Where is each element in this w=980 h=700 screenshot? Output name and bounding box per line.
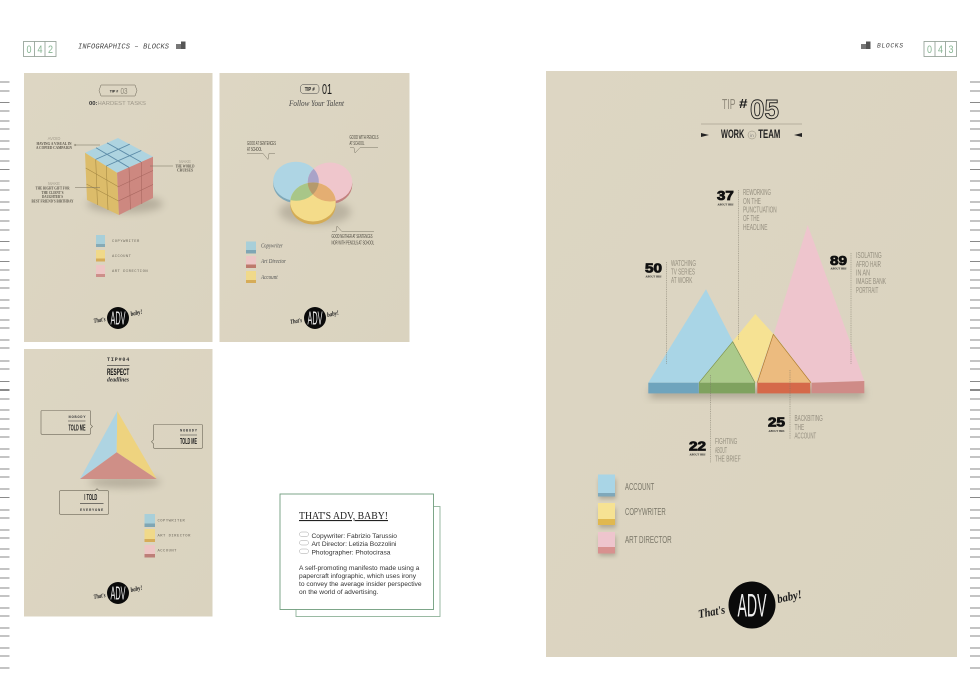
data label: 22: ABOUT HRS <box>689 452 706 456</box>
venn diagram <box>273 162 352 224</box>
logo: baby! <box>130 309 144 318</box>
data label: 37: HEADLINE <box>743 222 768 232</box>
legend <box>144 514 191 558</box>
tip 01 heading: Follow Your Talent <box>288 98 345 108</box>
pink triangle: art director 89 <box>774 225 864 393</box>
legend <box>246 242 287 283</box>
data label: 37: OF THE <box>743 213 760 223</box>
logo: ADV <box>110 308 126 328</box>
panel: tip 04 respect deadlines <box>24 349 212 616</box>
legend <box>96 235 148 277</box>
callout: i told everyone: EVERYONE <box>80 509 104 513</box>
callout: avoid: A COPIED CAMPAIGN <box>36 145 72 150</box>
data label: 22: ABOUT <box>715 445 727 455</box>
tip 05 heading: # <box>739 96 748 111</box>
callout: good neither: NOR WITH PENCILS AT SCHOOL <box>332 240 374 246</box>
rubik cube <box>85 138 153 215</box>
data label: 50: ABOUT HRS <box>645 274 662 278</box>
panel: tip 01 follow your talent <box>220 73 410 342</box>
callout: avoid: AVOID <box>48 136 60 141</box>
legend: Account <box>260 275 278 281</box>
page number right: 043: 0 <box>927 44 932 56</box>
tip 04 heading <box>107 357 130 384</box>
legend: ART DIRECTION <box>112 270 148 274</box>
legend: COPYWRITER <box>625 507 666 518</box>
page number right: 043 <box>924 42 956 56</box>
callout: i told everyone <box>60 489 108 514</box>
credits <box>300 532 397 556</box>
data label: 50: AT WORK <box>671 275 693 285</box>
data label: 50: 50 <box>645 262 662 276</box>
data label: 37: ON THE <box>743 196 761 206</box>
tip 03 heading: 03 <box>120 87 128 96</box>
tip 05 heading: in <box>750 133 754 138</box>
description <box>299 565 422 596</box>
credits: Art Director: Letizia Bozzolini <box>312 541 397 548</box>
logo: That's <box>93 592 106 601</box>
tip 03 heading: 00:HARDEST TASKS <box>89 101 147 107</box>
logo <box>93 307 144 329</box>
crop ticks: left edge <box>0 82 10 668</box>
description: papercraft infographic, which uses irony <box>299 573 417 580</box>
pyramid shadow <box>89 476 161 488</box>
data label: 89: ISOLATING <box>856 250 882 260</box>
tip 03 heading <box>89 85 147 107</box>
callout: good neither <box>332 226 374 246</box>
tip 04 heading: TIP#04 <box>107 357 129 363</box>
page number right: 043: 4 <box>938 44 943 56</box>
icon: blocks right <box>861 42 870 49</box>
description: on the world of advertising. <box>299 589 379 596</box>
pyramid <box>80 411 157 479</box>
callout: make the right gift: DAUGHTER'S <box>42 194 63 199</box>
data label: 25: ACCOUNT <box>794 431 816 441</box>
page number left: 042: 2 <box>48 44 53 56</box>
description: A self-promoting manifesto made using a <box>299 565 420 572</box>
callout: make the right gift: THE RIGHT GIFT FOR <box>36 186 70 190</box>
callout: good at sentences <box>247 141 276 160</box>
legend: ART DIRECTOR <box>625 535 672 546</box>
data label: 25: 25 <box>768 416 785 430</box>
legend: COPYWRITER <box>112 240 140 244</box>
callout: make the right gift: BEST FRIEND'S BIRTHDAY <box>32 198 74 204</box>
tip 04 heading: RESPECT <box>107 367 130 377</box>
logo: ADV <box>110 584 126 604</box>
blue triangle: account 50 <box>648 289 733 393</box>
data label: 25: BACKBITING <box>794 413 823 423</box>
tip 04 heading: deadlines <box>107 378 130 384</box>
data label: 37: ABOUT HRS <box>717 203 734 207</box>
data label: 89: 89 <box>830 254 847 268</box>
data label: 22: FIGHTING <box>715 436 737 446</box>
data label: 37 <box>717 187 777 340</box>
callout: i told everyone: I TOLD <box>84 493 97 502</box>
data label: 37: 37 <box>717 189 734 203</box>
data label: 50: WATCHING <box>671 258 696 268</box>
logo: That's <box>93 316 106 325</box>
legend: Art Director <box>260 259 287 265</box>
running header right: BLOCKS <box>877 42 903 50</box>
green overlap: fighting 22 <box>699 342 755 393</box>
callout: make the right gift: THE CLIENT'S <box>42 190 64 195</box>
data label: 50 <box>645 258 696 364</box>
logo: That's <box>290 317 303 326</box>
venn shadow <box>279 199 351 225</box>
data label: 89: AFRO HAIR <box>856 259 881 269</box>
tip 01 heading <box>288 81 345 108</box>
panel: tip 01 follow your talent: GOOD AT SENTENCES <box>247 141 276 147</box>
tip 01 heading: TIP # <box>305 87 315 93</box>
logo <box>290 307 340 329</box>
tip 05 heading: TEAM <box>758 129 780 141</box>
data label: 37: REWORKING <box>743 187 771 197</box>
data label: 25: THE <box>794 422 804 432</box>
logo: ADV <box>308 308 322 328</box>
callout: nobody told me right: TOLD ME <box>180 437 197 446</box>
callout: nobody told me right <box>152 424 202 448</box>
callout: good neither: GOOD NEITHER AT SENTENCES <box>332 234 373 240</box>
panel: tip 05 work in team <box>546 71 957 657</box>
callout: nobody told me right: NOBODY <box>180 430 198 434</box>
icon: blocks left <box>176 42 186 49</box>
callout: nobody told me left <box>41 410 92 434</box>
logo: baby! <box>326 310 340 319</box>
callout: make the world cruises: MAKE <box>179 159 191 164</box>
callout: make the world cruises <box>150 159 194 172</box>
legend <box>598 474 672 556</box>
page number left: 042: 0 <box>26 44 32 56</box>
legend: Copywriter <box>261 244 283 250</box>
logo: baby! <box>130 585 144 594</box>
legend: ACCOUNT <box>625 482 654 493</box>
tip 05 heading: 05 <box>750 94 779 124</box>
credits: Photographer: Photocirasa <box>312 550 391 556</box>
description: to convey the average insider perspective <box>299 581 422 588</box>
legend: ACCOUNT <box>112 255 132 259</box>
data label: 50: TV SERIES <box>671 267 695 277</box>
running header left: INFOGRAPHICS – BLOCKS <box>78 44 170 52</box>
logo: ADV <box>738 588 767 624</box>
data label: 89 <box>830 250 886 364</box>
logo <box>93 582 144 604</box>
panel: tip 03 hardest tasks <box>24 73 212 342</box>
data label: 22: THE BRIEF <box>715 454 741 464</box>
callout: avoid <box>36 136 100 150</box>
callout: make the world cruises: CRUISES <box>177 168 194 172</box>
data label: 89: ABOUT HRS <box>830 266 847 270</box>
cube shadow <box>87 195 163 213</box>
tip 05 heading: TIP <box>722 96 736 113</box>
callout: good at sentences: AT SCHOOL <box>247 147 262 153</box>
data label: 89: IMAGE BANK <box>856 276 886 286</box>
logo: That's <box>697 602 726 621</box>
page number left: 042: 4 <box>38 44 42 56</box>
callout: make the right gift: MAKE <box>48 181 60 186</box>
paper triangle chart <box>648 225 864 393</box>
data label: 25: ABOUT HRS <box>768 429 785 433</box>
panel: colophon credits <box>280 494 440 616</box>
crop ticks: right edge <box>970 82 980 668</box>
legend: COPYWRITER <box>158 520 186 524</box>
data label: 22: 22 <box>689 440 706 454</box>
callout: avoid: HAVING A VISUAL IN <box>36 141 72 146</box>
page number right: 043: 3 <box>948 44 954 56</box>
callout: good with pencils <box>350 135 379 153</box>
logo: baby! <box>776 587 803 606</box>
legend: ACCOUNT <box>158 550 177 554</box>
logo <box>697 582 803 628</box>
chart shadow <box>650 388 864 398</box>
callout: make the right gift <box>32 181 100 204</box>
tip 05 heading: WORK <box>721 129 745 141</box>
page number left: 042 <box>24 42 56 56</box>
legend: ART DIRECTOR <box>158 534 191 538</box>
data label: 89: PORTRAIT <box>856 285 878 295</box>
tip 03 heading: TIP # <box>110 90 118 94</box>
callout: make the world cruises: THE WORLD <box>176 164 194 168</box>
orange overlap: backbiting 25 <box>757 334 811 393</box>
data label: 37: PUNCTUATION <box>743 204 777 214</box>
callout: nobody told me left: NOBODY <box>68 416 86 420</box>
tip 05 heading <box>701 94 802 141</box>
data label: 89: IN AN <box>856 268 870 278</box>
colophon title: THAT'S ADV, BABY! <box>299 510 388 522</box>
callout: good with pencils: AT SCHOOL <box>350 141 364 147</box>
tip 01 heading: 01 <box>322 81 332 98</box>
credits: Copywriter: Fabrizio Tarussio <box>312 533 397 540</box>
callout: nobody told me left: TOLD ME <box>68 424 86 432</box>
yellow triangle: copywriter 37 <box>733 314 773 383</box>
data label: 22 <box>689 375 741 464</box>
data label: 25 <box>768 370 823 441</box>
callout: good with pencils: GOOD WITH PENCILS <box>350 135 379 141</box>
